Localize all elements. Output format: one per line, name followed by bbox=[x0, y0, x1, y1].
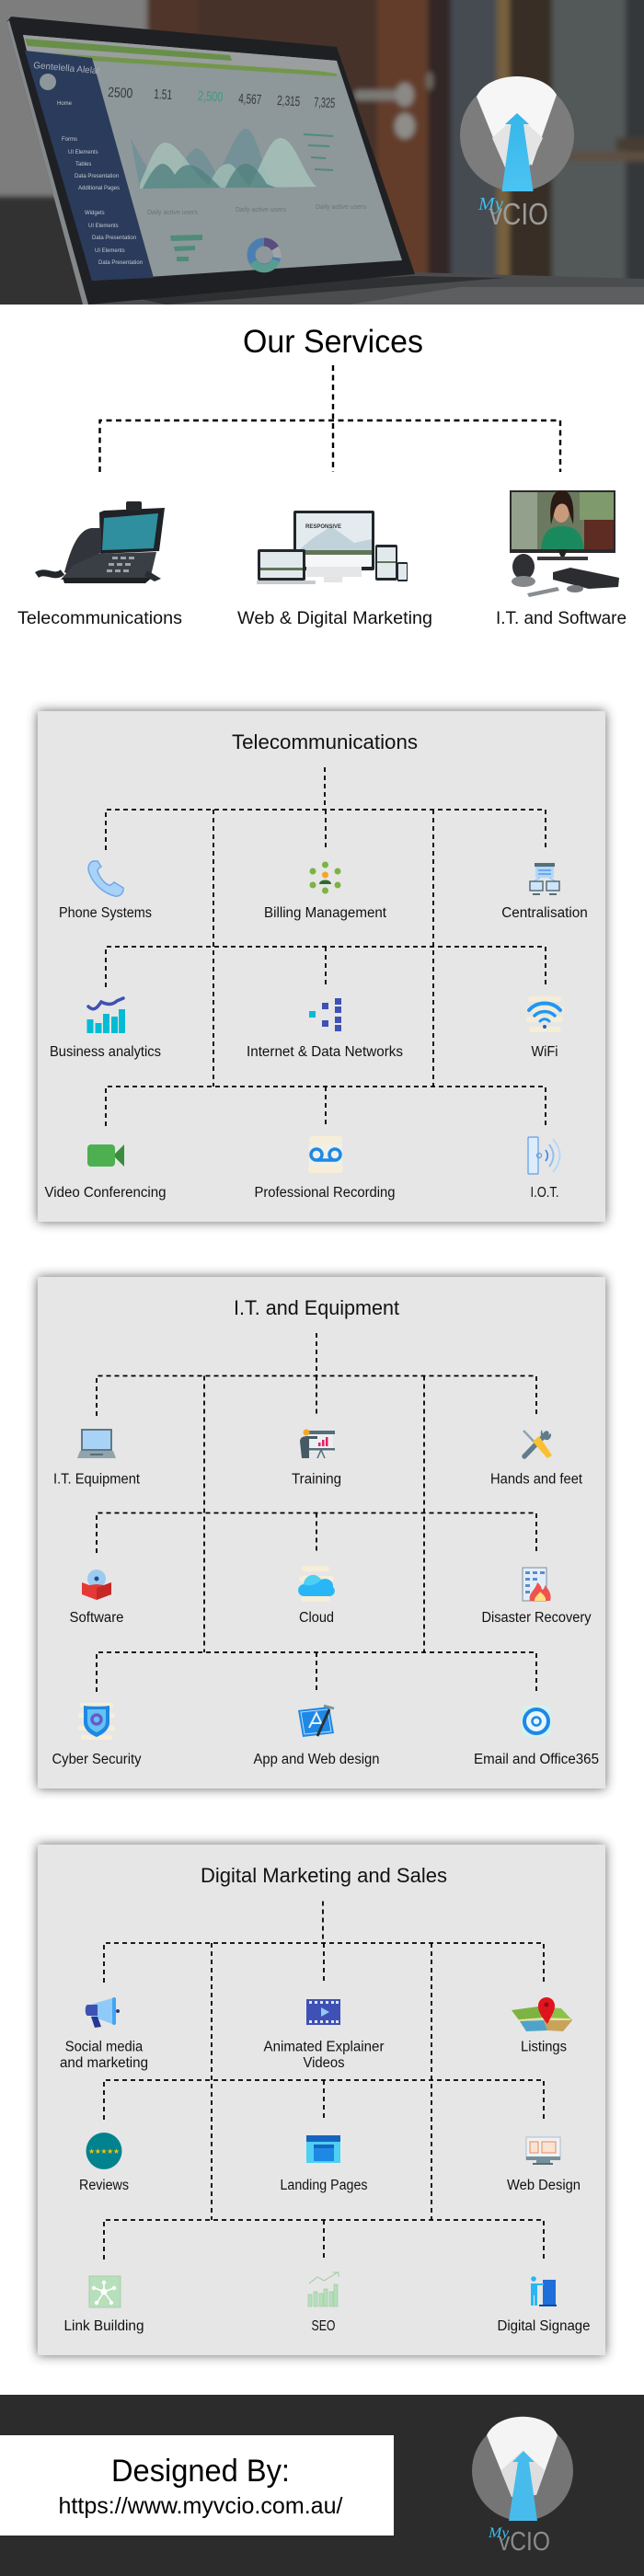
item: Centralisation bbox=[501, 863, 588, 921]
item: Animated Explainer Videos bbox=[263, 1999, 385, 2071]
item: Cloud bbox=[298, 1566, 335, 1626]
label: Video Conferencing bbox=[44, 1185, 166, 1201]
hero photo: laptop with analytics dashboard: Data Presentation bbox=[92, 236, 136, 241]
laptop screen bbox=[23, 35, 402, 281]
icon: link network square bbox=[89, 2276, 121, 2307]
label: Web & Digital Marketing bbox=[237, 609, 432, 628]
logo: myvcio: vCIO bbox=[499, 2527, 550, 2557]
laptop base and keyboard bbox=[88, 272, 644, 305]
dashboard captions: Daily active users bbox=[147, 210, 198, 216]
dashboard captions bbox=[147, 204, 366, 216]
item: Email and Office365 bbox=[474, 1706, 599, 1767]
label: App and Web design bbox=[254, 1752, 379, 1767]
label: Centralisation bbox=[501, 905, 588, 921]
icon: burning building bbox=[523, 1568, 551, 1601]
icon: megaphone bbox=[86, 1997, 120, 2028]
dashboard stat numbers: 1.51 bbox=[154, 86, 173, 103]
icon: monitor with layout bbox=[526, 2137, 560, 2165]
dashboard captions: Daily active users bbox=[316, 204, 366, 211]
item: Cyber Security bbox=[52, 1703, 142, 1767]
item: Training bbox=[292, 1430, 341, 1487]
hero photo: laptop with analytics dashboard: Data Presentation bbox=[98, 260, 143, 266]
label: Software bbox=[70, 1610, 123, 1626]
item: Billing Management bbox=[264, 861, 387, 921]
icon: data tree squares bbox=[309, 998, 341, 1031]
heading: Telecommunications bbox=[232, 730, 418, 753]
label: Cyber Security bbox=[52, 1752, 142, 1767]
item: Listings bbox=[512, 1997, 572, 2055]
icon: disc in red box bbox=[82, 1570, 111, 1600]
dashboard side bars bbox=[170, 133, 333, 261]
label: I.T. Equipment bbox=[53, 1472, 141, 1487]
icon: phone handset bbox=[88, 861, 123, 896]
connector tree bbox=[104, 1901, 544, 2260]
item: Video Conferencing bbox=[44, 1144, 166, 1201]
label line 2: and marketing bbox=[60, 2055, 148, 2071]
image: responsive devices bbox=[257, 511, 408, 584]
label: Digital Signage bbox=[497, 2318, 591, 2334]
item: Landing Pages bbox=[280, 2135, 368, 2193]
label: Business analytics bbox=[50, 1044, 161, 1060]
label: Web Design bbox=[507, 2178, 581, 2193]
label: I.T. and Software bbox=[496, 609, 627, 628]
hero photo: laptop with analytics dashboard: UI Elements bbox=[95, 248, 125, 254]
icon: crossed wrench and screwdriver bbox=[523, 1430, 552, 1458]
item: Software bbox=[70, 1570, 123, 1626]
dashboard stat numbers: 2,315 bbox=[277, 93, 301, 109]
label: I.O.T. bbox=[530, 1185, 559, 1201]
dashboard stat numbers bbox=[109, 86, 335, 109]
icon: presenter at chart board bbox=[300, 1430, 335, 1458]
label: Email and Office365 bbox=[474, 1752, 599, 1767]
dashboard donut bbox=[251, 242, 277, 269]
icon: voicemail tape bbox=[308, 1136, 343, 1173]
hero photo: laptop with analytics dashboard: Tables bbox=[75, 162, 91, 167]
icon: map with red pin bbox=[512, 1997, 572, 2031]
item: Professional Recording bbox=[254, 1136, 396, 1201]
item: Web Design bbox=[507, 2137, 581, 2193]
label: Training bbox=[292, 1472, 341, 1487]
icon: door sensor with waves bbox=[528, 1137, 559, 1174]
logo: myvcio bbox=[472, 2417, 573, 2557]
label: Professional Recording bbox=[254, 1185, 396, 1201]
icon: video camera bbox=[87, 1144, 124, 1167]
item: Hands and feet bbox=[490, 1430, 583, 1487]
dashboard stat numbers: 2500 bbox=[108, 85, 133, 101]
label: Internet & Data Networks bbox=[247, 1044, 403, 1060]
icon: person beside sign bbox=[531, 2276, 557, 2306]
item: App and Web design bbox=[254, 1706, 379, 1767]
item: SEO bbox=[308, 2272, 339, 2334]
service: Web & Digital Marketing bbox=[237, 511, 432, 628]
dashboard sidebar bbox=[25, 51, 154, 281]
dashboard area chart bbox=[131, 129, 316, 189]
callout: designed by bbox=[0, 2435, 394, 2536]
item: I.T. Equipment bbox=[53, 1430, 141, 1487]
label: Landing Pages bbox=[280, 2178, 368, 2193]
label: Animated Explainer bbox=[263, 2039, 385, 2055]
item: Digital Signage bbox=[497, 2276, 591, 2334]
item: Link Building bbox=[64, 2276, 144, 2334]
image: video conference screen and camera bbox=[510, 490, 619, 597]
hero photo: laptop with analytics dashboard: UI Elements bbox=[88, 224, 119, 229]
logo: myvcio: My bbox=[477, 194, 503, 214]
hero photo: laptop with analytics dashboard: Forms bbox=[62, 137, 77, 143]
panel: I.T. and Equipment bbox=[38, 1277, 605, 1788]
service: I.T. and Software bbox=[496, 490, 627, 628]
item: I.O.T. bbox=[528, 1137, 559, 1201]
label: Hands and feet bbox=[490, 1472, 583, 1487]
icon: laptop bbox=[77, 1430, 116, 1458]
item: Business analytics bbox=[50, 998, 161, 1060]
hero photo: laptop with analytics dashboard: Data Presentation bbox=[75, 174, 119, 179]
item: Phone Systems bbox=[59, 861, 152, 921]
label: Social media bbox=[65, 2039, 144, 2055]
label: Listings bbox=[521, 2039, 567, 2055]
icon: wifi signal bbox=[526, 996, 564, 1032]
item: WiFi bbox=[526, 996, 564, 1060]
panel: Digital Marketing and Sales bbox=[38, 1845, 605, 2355]
image: responsive devices: RESPONSIVE bbox=[305, 524, 341, 530]
heading: Digital Marketing and Sales bbox=[201, 1864, 447, 1887]
dashboard stat numbers: 4,567 bbox=[238, 91, 262, 108]
label: WiFi bbox=[532, 1044, 558, 1060]
hero photo: laptop with analytics dashboard: Gentelella Alela! bbox=[33, 61, 100, 76]
footer band bbox=[0, 2395, 644, 2576]
laptop lid bbox=[6, 17, 415, 305]
connector: services tree bbox=[99, 365, 560, 472]
icon: at sign bbox=[522, 1706, 551, 1737]
connector tree bbox=[97, 1333, 536, 1692]
label: Billing Management bbox=[264, 905, 387, 921]
icon: five stars in teal circle: ★★★★★ bbox=[88, 2147, 120, 2156]
dashboard captions: Daily active users bbox=[236, 207, 286, 213]
icon: billing people ring bbox=[309, 861, 340, 894]
icon: film strip with play bbox=[306, 1999, 340, 2025]
label: Phone Systems bbox=[59, 905, 152, 921]
heading: I.T. and Equipment bbox=[234, 1296, 399, 1319]
connector tree bbox=[106, 767, 546, 1126]
heading: Designed By: bbox=[111, 2454, 290, 2489]
icon: bar chart with trend line bbox=[86, 998, 125, 1033]
icon: network with two monitors bbox=[530, 863, 559, 894]
label: Cloud bbox=[299, 1610, 334, 1626]
logo: myvcio: vCIO bbox=[489, 197, 548, 231]
icon: cloud bbox=[298, 1566, 335, 1602]
dashboard stat numbers: 7,325 bbox=[314, 95, 336, 111]
hero photo: laptop with analytics dashboard: Additional Pages bbox=[78, 186, 120, 191]
icon: browser window bbox=[306, 2135, 340, 2163]
panel: Telecommunications bbox=[38, 711, 605, 1222]
dashboard stat numbers: 2,500 bbox=[198, 88, 224, 105]
item: Social media and marketing bbox=[60, 1997, 148, 2071]
icon: app blueprint with hammer bbox=[298, 1706, 334, 1737]
label: Telecommunications bbox=[17, 609, 182, 628]
logo: myvcio bbox=[460, 76, 574, 231]
label: Disaster Recovery bbox=[482, 1610, 592, 1626]
logo: myvcio: My bbox=[488, 2525, 510, 2541]
hero photo: laptop with analytics dashboard: Home bbox=[57, 101, 73, 107]
label line 2: Videos bbox=[304, 2055, 345, 2071]
item: Reviews bbox=[79, 2133, 129, 2193]
hero photo: laptop with analytics dashboard: UI Elements bbox=[68, 150, 98, 155]
image: desk video phone bbox=[37, 501, 165, 583]
item: Internet & Data Networks bbox=[247, 998, 403, 1060]
label: Reviews bbox=[79, 2178, 129, 2193]
service: Telecommunications bbox=[17, 501, 182, 628]
icon: shield with gear bbox=[78, 1703, 115, 1740]
item: Disaster Recovery bbox=[482, 1568, 592, 1626]
label: SEO bbox=[311, 2318, 335, 2334]
background: office door and glass bbox=[0, 0, 644, 311]
hero photo: laptop with analytics dashboard: Widgets bbox=[85, 211, 105, 216]
browser chrome bbox=[23, 35, 339, 75]
website url: https://www.myvcio.com.au/ bbox=[59, 2493, 343, 2519]
icon: growth bars with arrow bbox=[308, 2272, 339, 2306]
label: Link Building bbox=[64, 2318, 144, 2334]
hero photo: laptop with analytics dashboard bbox=[0, 0, 644, 311]
section title: Our Services: Our Services bbox=[243, 324, 423, 360]
